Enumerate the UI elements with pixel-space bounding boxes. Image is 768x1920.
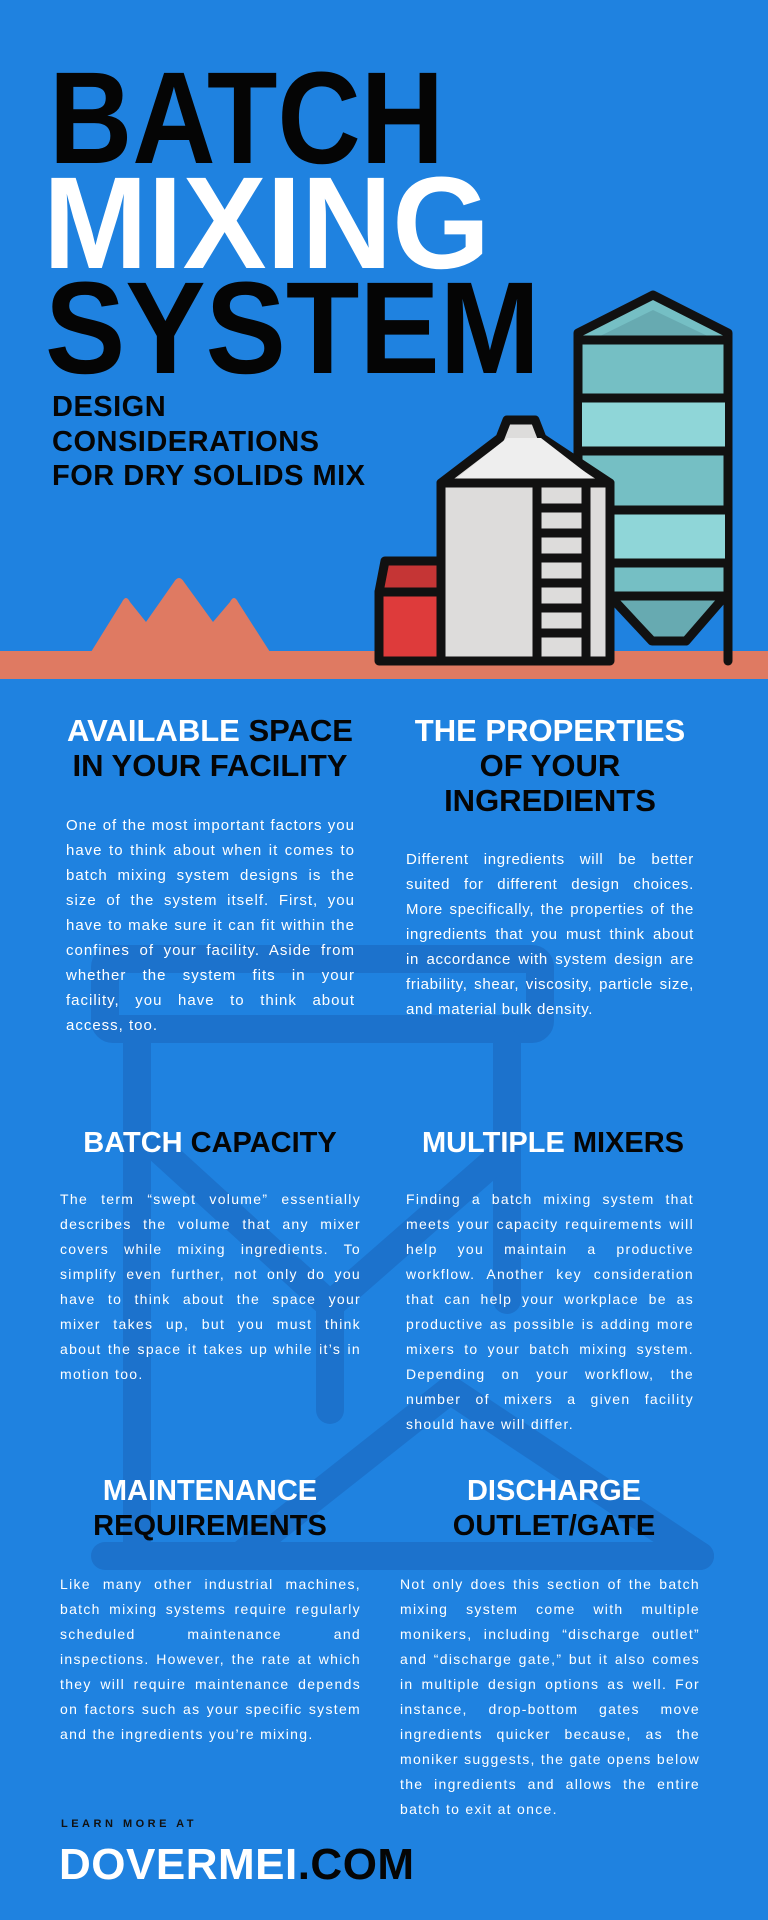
heading: discharge [453,1475,655,1542]
heading: available space: AVAILABLE SPACE [67,713,353,748]
heading: available space [67,713,353,783]
middle silo [441,420,610,661]
icon: mountains [92,578,270,651]
heading: discharge: OUTLET/GATE [453,1510,655,1542]
ground band [0,651,768,679]
heading: multiple mixers: MULTIPLE MIXERS [422,1127,684,1159]
text: maintenance: Like many other industrial machines, batch mixing systems require regularly scheduled maintenance and inspections. However, the rate at which they will require maintenance depends on factors such as your specific system and the ingredients you’re mixing. [60,1576,361,1742]
title: MIXING [43,149,490,296]
text: discharge: Not only does this section of the batch mixing system come with multiple monikers, including “discharge outlet” and “discharge gate,” but it also comes in multiple design options as well. For instance, drop-bottom gates move ingredients quicker because, as the moniker suggests, the gate opens below the ingredients and allows the entire batch to exit at once. [400,1576,700,1817]
subtitle: FOR DRY SOLIDS MIX [52,460,366,492]
heading: discharge: DISCHARGE [467,1475,641,1507]
text: multiple mixers: Finding a batch mixing system that meets your capacity requirements will help you maintain a productive workflow. Another key consideration that can help your workplace be as productive as possible is adding more mixers to your batch mixing system. Depending on your workflow, the number of mixers a given facility should have will differ. [406,1191,694,1432]
subtitle: DESIGN [52,391,166,423]
heading: available space: IN YOUR FACILITY [72,748,348,783]
heading: properties: OF YOUR [480,748,620,783]
icon: silos [374,290,732,666]
text: batch capacity: The term “swept volume” essentially describes the volume that any mixer covers while mixing ingredients. To simplify even further, not only do you have to think about the space your mixer takes up, but you must think about the space it takes up while it’s in motion too. [60,1191,361,1382]
heading: properties: THE PROPERTIES [415,713,685,748]
heading: maintenance: REQUIREMENTS [93,1510,327,1542]
footer: url: DOVERMEI.COM [59,1840,415,1889]
red box [379,592,441,661]
footer: learn more: LEARN MORE AT [61,1818,197,1830]
title [43,44,540,380]
tall silo [610,596,725,641]
heading: properties [415,713,685,818]
subtitle: CONSIDERATIONS [52,426,319,458]
heading: batch capacity: BATCH CAPACITY [83,1127,337,1159]
text: properties: Different ingredients will be better suited for different design choices. More specifically, the properties of the ingredients that you must think about in accordance with system design are friability, shear, viscosity, particle size, and material bulk density. [406,851,694,1018]
heading: maintenance [93,1475,327,1542]
text: available space: One of the most important factors you have to think about when it comes to batch mixing system designs is the size of the system itself. First, you have to make sure it can fit within the confines of your facility. Aside from whether the system fits in your facility, you have to think about access, too. [66,817,355,1034]
subtitle [52,391,366,492]
heading: properties: INGREDIENTS [444,783,656,818]
heading: maintenance: MAINTENANCE [103,1475,317,1507]
title: BATCH [49,44,444,191]
